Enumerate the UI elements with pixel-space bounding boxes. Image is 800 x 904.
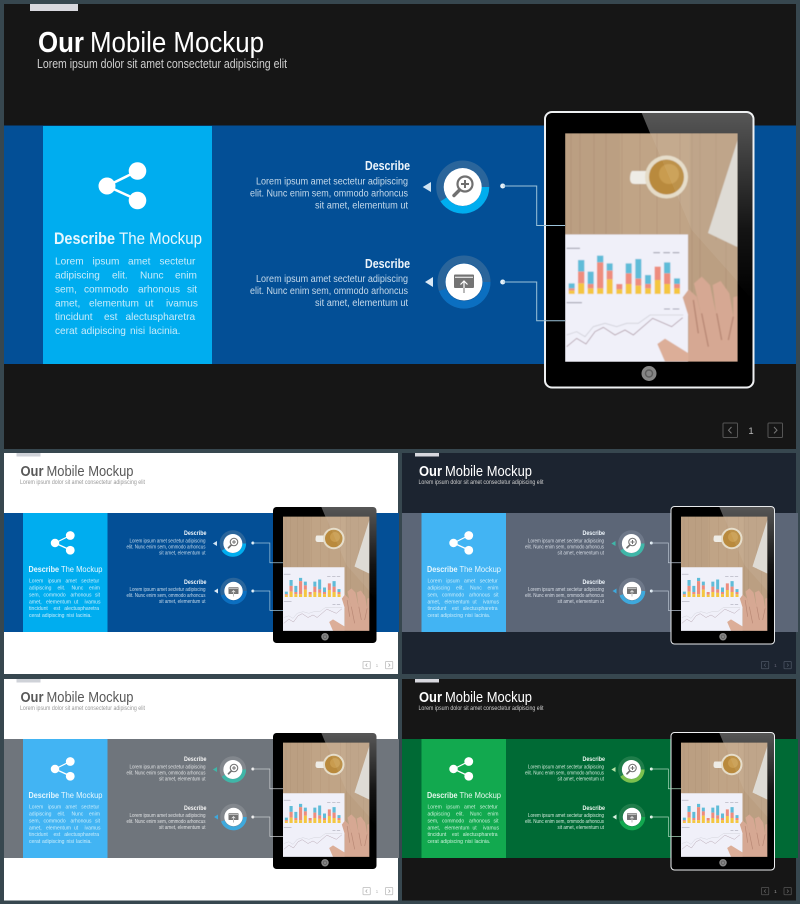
panel body text: sem, xyxy=(428,818,438,824)
panel body text: adipiscing xyxy=(81,326,126,337)
title: Mobile Mockup xyxy=(90,27,264,59)
title: Mobile Mockup xyxy=(46,690,134,706)
describe block 2: Describe xyxy=(365,256,410,271)
panel body text: ivamus xyxy=(84,825,101,831)
describe block 1 xyxy=(126,530,207,556)
panel body text: Lorem xyxy=(428,578,442,584)
top accent bar xyxy=(415,453,439,456)
panel body text: elit. xyxy=(58,811,65,817)
title: Our xyxy=(419,690,442,706)
describe block 2 xyxy=(525,805,605,831)
slide 4: white and grey xyxy=(4,679,399,900)
panel body text: ut xyxy=(472,825,477,831)
title: Our xyxy=(20,464,44,480)
panel body text: Nunc xyxy=(72,585,84,591)
panel body text: amet xyxy=(66,578,77,584)
panel body text: elit. xyxy=(58,585,65,591)
top accent bar xyxy=(415,679,439,682)
panel body text: Lorem xyxy=(29,578,43,584)
panel body text: amet, xyxy=(428,825,440,831)
panel body text: est xyxy=(54,832,61,838)
panel body text: enim xyxy=(89,585,100,591)
panel body text: enim xyxy=(488,811,498,817)
describe block 1 xyxy=(126,756,207,782)
describe block 1: Lorem ipsum amet sectetur adipiscing xyxy=(130,538,206,544)
connector 1 xyxy=(251,542,283,563)
panel body text: Lorem xyxy=(55,256,84,268)
slide 5: black and green xyxy=(402,679,798,900)
panel body text: ipsum xyxy=(92,256,119,268)
describe block 2: Lorem ipsum amet sectetur adipiscing xyxy=(528,587,604,593)
describe block 1: elit. Nunc enim sem, ommodo arhoncus xyxy=(126,770,206,776)
panel body text: amet xyxy=(464,578,476,584)
panel body text: adipiscing xyxy=(428,585,450,591)
panel body text: amet xyxy=(66,804,77,810)
top accent bar xyxy=(16,679,40,682)
panel body text: tincidunt xyxy=(29,832,48,838)
icon: share xyxy=(51,757,75,781)
panel body text: ipsum xyxy=(48,804,61,810)
panel body text: sectetur xyxy=(81,804,100,810)
pager xyxy=(762,662,791,669)
pager xyxy=(762,888,791,895)
title: Mobile Mockup xyxy=(445,464,532,480)
describe block 1: Describe xyxy=(184,530,207,537)
panel body text: tincidunt xyxy=(428,832,447,838)
describe block 2: elit. Nunc enim sem, ommodo arhoncus xyxy=(250,286,408,297)
panel body text: arhonous xyxy=(138,284,180,296)
panel body text: nisi xyxy=(66,613,74,619)
describe block 2 xyxy=(250,256,410,309)
panel body text: arhonous xyxy=(469,592,491,598)
panel heading: Describe xyxy=(54,229,115,248)
panel body text: adipiscing xyxy=(55,270,100,282)
panel body text: lacinia. xyxy=(76,613,92,619)
icon: browser ring xyxy=(612,580,643,602)
panel body text: alectuspharetra xyxy=(64,832,99,838)
panel body text: cerat xyxy=(428,839,439,845)
icon: magnifier ring xyxy=(423,164,485,210)
panel body text: sit xyxy=(494,592,499,598)
panel body text: est xyxy=(104,312,118,323)
panel body text: elit. xyxy=(456,585,464,591)
describe block 2: Describe xyxy=(184,579,207,586)
panel heading: Describe xyxy=(427,564,458,574)
describe block 1: Lorem ipsum amet sectetur adipiscing xyxy=(528,764,604,770)
connector 2 xyxy=(650,816,681,836)
panel body text: cerat xyxy=(29,613,41,619)
panel body text: sem, xyxy=(55,284,77,296)
tablet mockup xyxy=(671,506,774,644)
panel body text: nisi xyxy=(465,613,473,619)
tablet mockup xyxy=(273,733,376,869)
panel body text: sit xyxy=(494,818,499,824)
describe block 2: elit. Nunc enim sem, ommodo arhoncus xyxy=(525,593,604,599)
panel body text: Nunc xyxy=(470,811,482,817)
describe block 2: Lorem ipsum amet sectetur adipiscing xyxy=(130,587,206,593)
subtitle: Lorem ipsum dolor sit amet consectetur adipiscing elit xyxy=(37,57,287,71)
top accent bar xyxy=(30,4,78,11)
icon: browser ring xyxy=(425,259,487,305)
panel body text: Nunc xyxy=(470,585,482,591)
panel body text: sit xyxy=(95,592,101,598)
panel body text: elementum xyxy=(444,599,469,605)
panel body text: Nunc xyxy=(72,811,84,817)
describe block 1: sit amet, elementum ut xyxy=(315,200,408,212)
subtitle: Lorem ipsum dolor sit amet consectetur adipiscing elit xyxy=(418,705,544,712)
panel body text: sit xyxy=(187,284,197,296)
panel heading: The Mockup xyxy=(61,564,103,574)
connector 2 xyxy=(251,590,283,610)
panel heading: The Mockup xyxy=(460,790,501,800)
connector 1 xyxy=(500,184,565,226)
pager xyxy=(363,888,393,895)
panel: describe the mockup xyxy=(23,739,108,858)
panel body text: enim xyxy=(175,270,197,282)
band xyxy=(402,739,798,858)
pager: 1 xyxy=(376,663,379,669)
panel body text: lacinia. xyxy=(76,839,92,845)
panel body text: nisi xyxy=(130,326,145,337)
slide 3: navy and slate xyxy=(402,453,798,674)
panel body text: amet xyxy=(464,804,476,810)
pager xyxy=(363,662,393,669)
panel body text: ivamus xyxy=(483,599,499,605)
icon: browser ring xyxy=(612,806,643,828)
panel: describe the mockup xyxy=(422,739,506,858)
icon: share xyxy=(449,757,473,781)
panel body text: arhonous xyxy=(70,592,92,598)
describe block 1: elit. Nunc enim sem, ommodo arhoncus xyxy=(525,770,604,776)
panel body text: sit xyxy=(95,818,101,824)
tablet mockup xyxy=(545,112,754,388)
panel body text: lacinia. xyxy=(474,613,490,619)
title: Our xyxy=(38,27,84,59)
panel: describe the mockup xyxy=(422,513,506,632)
panel body text: est xyxy=(54,606,61,612)
panel body text: est xyxy=(452,606,459,612)
describe block 2: sit amet, elementum ut xyxy=(159,825,206,831)
describe block 1: Describe xyxy=(582,530,605,537)
describe block 1 xyxy=(525,530,605,556)
describe block 2: sit amet, elementum ut xyxy=(558,599,605,605)
panel body text: tincidunt xyxy=(29,606,48,612)
panel body text: nisi xyxy=(465,839,473,845)
panel body text: elit. xyxy=(112,270,128,282)
pager: 1 xyxy=(748,426,754,437)
describe block 1: elit. Nunc enim sem, ommodo arhoncus xyxy=(126,544,206,550)
title: Our xyxy=(20,690,44,706)
panel body text: elementum xyxy=(46,825,71,831)
panel body text: amet, xyxy=(428,599,440,605)
panel heading: Describe xyxy=(28,564,59,574)
panel body text: amet, xyxy=(29,825,42,831)
describe block 2: Lorem ipsum amet sectetur adipiscing xyxy=(528,813,604,819)
describe block 2: sit amet, elementum ut xyxy=(558,825,605,831)
panel body text: cerat xyxy=(29,839,41,845)
title: Mobile Mockup xyxy=(46,464,134,480)
icon: share xyxy=(51,531,75,555)
describe block 1: sit amet, elementum ut xyxy=(558,550,605,556)
panel body text: ipsum xyxy=(446,578,460,584)
panel body text: tincidunt xyxy=(428,606,447,612)
panel body text: ivamus xyxy=(166,298,198,310)
panel body text: adipiscing xyxy=(440,839,463,845)
describe block 1: Lorem ipsum amet sectetur adipiscing xyxy=(528,538,604,544)
describe block 2: elit. Nunc enim sem, ommodo arhoncus xyxy=(126,819,206,825)
panel body text: nisi xyxy=(66,839,74,845)
icon: magnifier ring xyxy=(213,758,244,781)
panel body text: arhonous xyxy=(469,818,491,824)
panel body text: Lorem xyxy=(428,804,442,810)
pager: 1 xyxy=(774,663,777,669)
panel body text: Lorem xyxy=(29,804,43,810)
describe block 2: Describe xyxy=(582,805,605,812)
panel body text: enim xyxy=(488,585,498,591)
title: Our xyxy=(419,464,442,480)
describe block 1: elit. Nunc enim sem, ommodo arhoncus xyxy=(250,188,408,200)
panel body text: sectetur xyxy=(480,578,498,584)
icon: magnifier ring xyxy=(213,532,244,555)
title: Mobile Mockup xyxy=(445,690,532,706)
connector 2 xyxy=(650,590,681,610)
describe block 1: sit amet, elementum ut xyxy=(558,776,605,782)
panel body text: commodo xyxy=(44,818,66,824)
panel body text: sectetur xyxy=(81,578,100,584)
panel heading: The Mockup xyxy=(460,564,501,574)
panel heading: The Mockup xyxy=(61,790,103,800)
band xyxy=(402,513,798,632)
panel body text: est xyxy=(452,832,459,838)
panel body text: ivamus xyxy=(84,599,101,605)
describe block 2 xyxy=(525,579,605,605)
panel body text: elementum xyxy=(89,298,139,310)
panel body text: adipiscing xyxy=(42,613,65,619)
panel body text: enim xyxy=(89,811,100,817)
panel body text: commodo xyxy=(84,284,129,296)
describe block 2: Describe xyxy=(582,579,605,586)
panel body text: amet xyxy=(128,256,151,268)
panel body text: amet, xyxy=(29,599,42,605)
panel body text: ivamus xyxy=(483,825,499,831)
panel body text: ut xyxy=(145,298,154,310)
connector 1 xyxy=(650,542,681,563)
panel: describe the mockup xyxy=(43,126,212,364)
band xyxy=(4,126,796,364)
panel body text: cerat xyxy=(428,613,439,619)
panel body text: ut xyxy=(74,825,79,831)
panel body text: elementum xyxy=(444,825,469,831)
connector 1 xyxy=(650,768,681,789)
panel body text: Nunc xyxy=(140,270,164,282)
panel body text: elit. xyxy=(456,811,464,817)
pager: 1 xyxy=(774,889,777,895)
pager xyxy=(723,423,782,438)
panel body text: tincidunt xyxy=(55,312,93,323)
describe block 2: sit amet, elementum ut xyxy=(159,599,206,605)
tablet mockup xyxy=(671,732,774,870)
connector 1 xyxy=(251,768,283,789)
describe block 2 xyxy=(126,579,207,605)
describe block 1 xyxy=(250,158,410,212)
describe block 1 xyxy=(525,756,605,782)
panel body text: sem, xyxy=(428,592,438,598)
pager: 1 xyxy=(376,889,379,895)
panel body text: adipiscing xyxy=(428,811,450,817)
panel body text: ipsum xyxy=(446,804,460,810)
connector 2 xyxy=(251,816,283,836)
connector 2 xyxy=(500,280,565,321)
panel body text: arhonous xyxy=(70,818,92,824)
panel body text: cerat xyxy=(55,326,78,337)
describe block 2: elit. Nunc enim sem, ommodo arhoncus xyxy=(126,593,206,599)
panel body text: amet, xyxy=(55,298,80,310)
describe block 1: Describe xyxy=(582,756,605,763)
band xyxy=(4,739,399,858)
panel body text: ut xyxy=(74,599,79,605)
describe block 1: Lorem ipsum amet sectetur adipiscing xyxy=(256,176,408,188)
panel body text: ut xyxy=(472,599,477,605)
panel heading: The Mockup xyxy=(119,229,202,248)
panel body text: commodo xyxy=(44,592,66,598)
panel body text: sectetur xyxy=(480,804,498,810)
top accent bar xyxy=(16,453,40,456)
panel body text: lacinia. xyxy=(149,326,180,337)
panel heading: Describe xyxy=(427,790,458,800)
panel body text: sectetur xyxy=(160,256,196,268)
band xyxy=(4,513,399,632)
describe block 2 xyxy=(126,805,207,831)
icon: share xyxy=(449,531,473,555)
icon: browser ring xyxy=(214,580,245,602)
describe block 2: Describe xyxy=(184,805,207,812)
panel body text: sem, xyxy=(29,592,40,598)
subtitle: Lorem ipsum dolor sit amet consectetur adipiscing elit xyxy=(418,479,544,486)
panel body text: alectuspharetra xyxy=(126,312,195,323)
panel body text: adipiscing xyxy=(29,585,52,591)
panel body text: lacinia. xyxy=(474,839,490,845)
tablet mockup xyxy=(273,507,376,643)
describe block 1: sit amet, elementum ut xyxy=(159,550,206,556)
describe block 1: sit amet, elementum ut xyxy=(159,776,206,782)
describe block 1: Describe xyxy=(184,756,207,763)
panel body text: elementum xyxy=(46,599,71,605)
panel body text: alectuspharetra xyxy=(64,606,99,612)
slide 1: dark blue large xyxy=(4,4,796,449)
describe block 1: Describe xyxy=(365,158,410,173)
panel body text: alectuspharetra xyxy=(463,606,498,612)
panel body text: adipiscing xyxy=(42,839,65,845)
panel body text: commodo xyxy=(442,592,464,598)
icon: magnifier ring xyxy=(611,532,643,555)
icon: share xyxy=(98,162,146,209)
icon: browser ring xyxy=(214,806,245,828)
icon: magnifier ring xyxy=(611,758,643,781)
describe block 2: elit. Nunc enim sem, ommodo arhoncus xyxy=(525,819,604,825)
panel: describe the mockup xyxy=(23,513,108,632)
describe block 2: Lorem ipsum amet sectetur adipiscing xyxy=(130,813,206,819)
panel body text: adipiscing xyxy=(29,811,52,817)
describe block 1: Lorem ipsum amet sectetur adipiscing xyxy=(130,764,206,770)
panel body text: sem, xyxy=(29,818,40,824)
slide 2: white and blue xyxy=(4,453,399,674)
subtitle: Lorem ipsum dolor sit amet consectetur adipiscing elit xyxy=(20,479,145,486)
describe block 1: elit. Nunc enim sem, ommodo arhoncus xyxy=(525,544,604,550)
panel heading: Describe xyxy=(28,790,59,800)
describe block 2: sit amet, elementum ut xyxy=(315,298,408,309)
subtitle: Lorem ipsum dolor sit amet consectetur adipiscing elit xyxy=(20,705,145,712)
panel body text: commodo xyxy=(442,818,464,824)
describe block 2: Lorem ipsum amet sectetur adipiscing xyxy=(256,274,408,285)
panel body text: ipsum xyxy=(48,578,61,584)
panel body text: adipiscing xyxy=(440,613,463,619)
panel body text: alectuspharetra xyxy=(463,832,498,838)
